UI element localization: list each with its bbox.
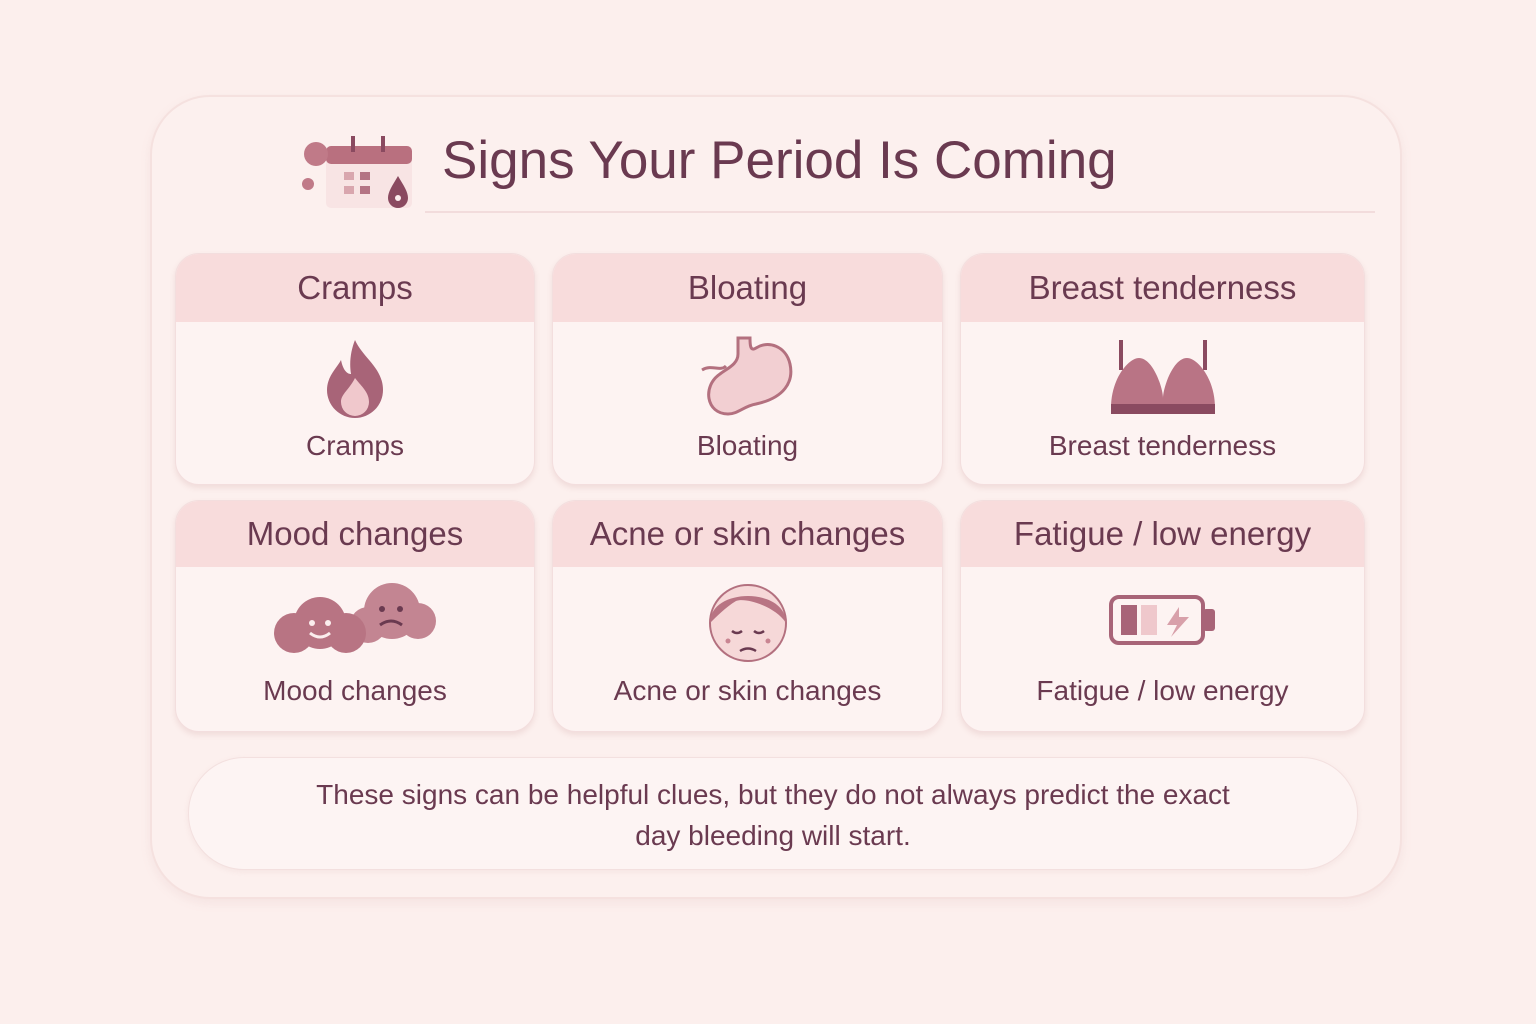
footer note (188, 757, 1358, 870)
title icon: calendar (302, 136, 412, 208)
card: Fatigue: Fatigue / low energy (1036, 675, 1289, 706)
card: Breast tenderness (960, 253, 1365, 485)
icon: stomach (701, 336, 792, 416)
card: Cramps (175, 253, 535, 485)
icon: battery (1109, 595, 1215, 645)
card: Acne: Acne or skin changes (614, 675, 881, 706)
card: Bloating: Bloating (688, 269, 807, 306)
card: Acne: Acne or skin changes (590, 515, 905, 552)
card: Fatigue: Fatigue / low energy (1014, 515, 1311, 552)
card: Mood changes: Mood changes (247, 515, 463, 552)
title: Signs Your Period Is Coming (442, 131, 1117, 190)
card: Bloating: Bloating (697, 430, 798, 461)
icon: clouds (274, 583, 436, 653)
footer note: day bleeding will start. (635, 820, 911, 851)
icon: face (709, 584, 787, 662)
card: Breast tenderness: Breast tenderness (1049, 430, 1276, 461)
card: Cramps: Cramps (306, 430, 404, 461)
icon: bra (1111, 340, 1215, 414)
footer note: These signs can be helpful clues, but they do not always predict the exact (316, 779, 1230, 810)
card: Breast tenderness: Breast tenderness (1029, 269, 1296, 306)
card: Cramps: Cramps (297, 269, 413, 306)
outer panel (150, 95, 1402, 899)
icon: flame (327, 340, 383, 418)
card: Acne (552, 500, 943, 732)
card: Mood changes (175, 500, 535, 732)
card: Mood changes: Mood changes (263, 675, 447, 706)
card: Bloating (552, 253, 943, 485)
card: Fatigue (960, 500, 1365, 732)
